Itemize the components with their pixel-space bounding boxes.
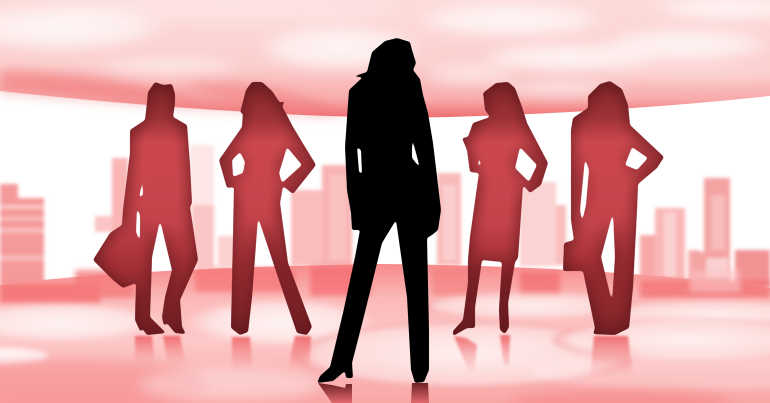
figure: woman in skirt with phone xyxy=(453,82,548,336)
skyline: blurred pink city buildings xyxy=(0,145,770,286)
figure: woman with handbag xyxy=(93,82,198,335)
figure reflection: central silhouette xyxy=(318,383,429,403)
figure: central black silhouette xyxy=(317,38,441,383)
reflections of the figures on the floor xyxy=(135,335,633,378)
floor: glossy reflective ellipses xyxy=(0,264,770,403)
ceiling: pink overlapping ellipses xyxy=(0,0,770,117)
figure: woman with hands on hips xyxy=(219,82,316,335)
figure: woman with handbag and hand on hip xyxy=(563,81,664,335)
